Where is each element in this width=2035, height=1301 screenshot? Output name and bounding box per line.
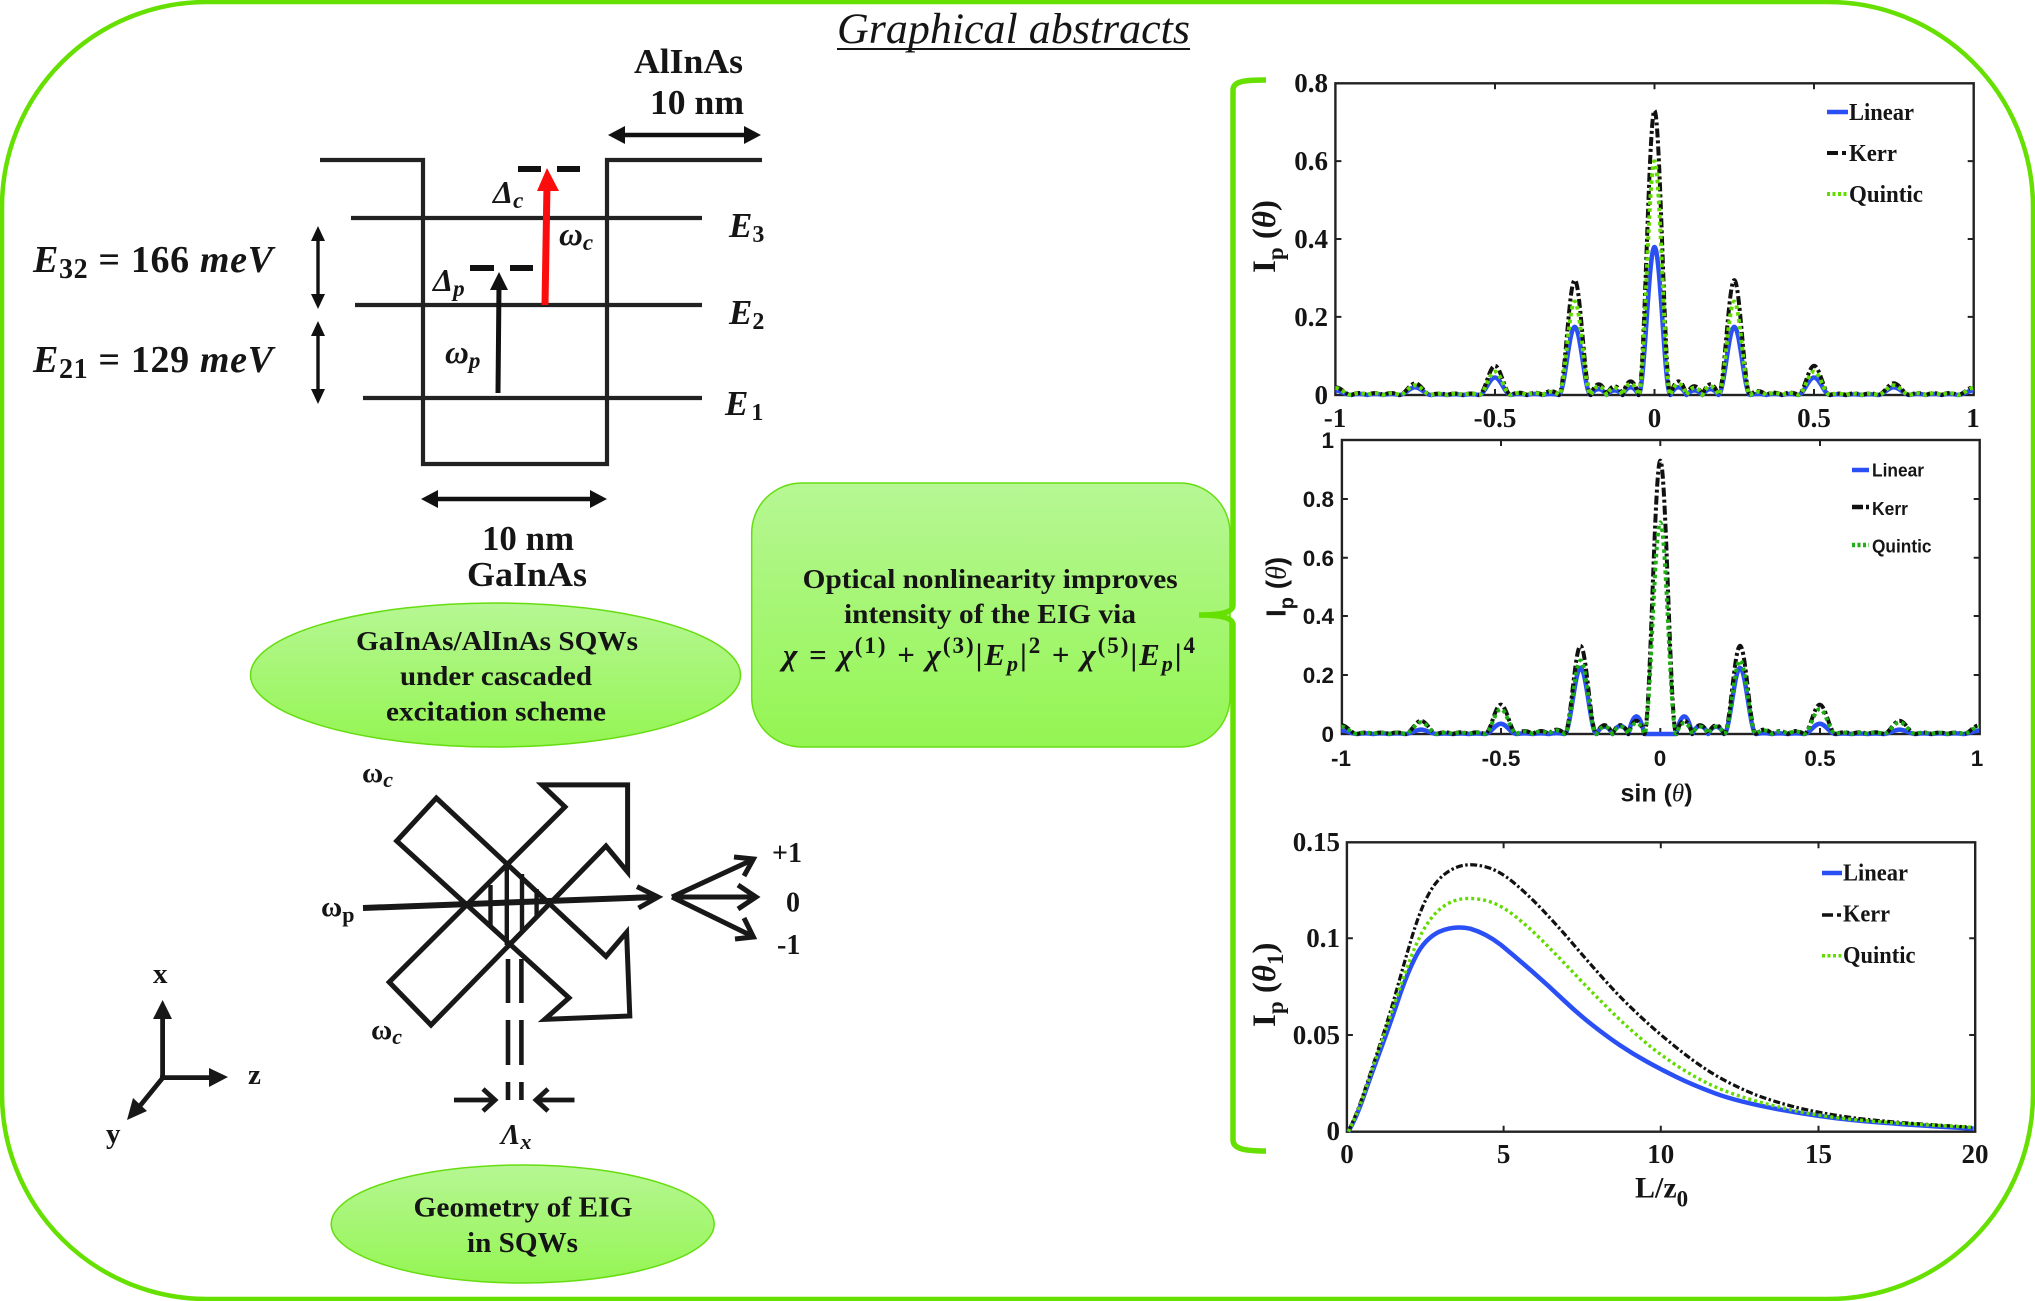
label: AlInAs 10 nm: [634, 42, 744, 122]
arrows: grating period: [454, 1089, 574, 1111]
y axis title: θ): [1247, 200, 1283, 228]
tick labels: 0.6: [1303, 546, 1334, 571]
label: probe: p: [342, 902, 354, 927]
legend: [1852, 460, 1932, 557]
dashed level: probe detuning: [431, 262, 533, 301]
diffraction order arrows: [672, 857, 756, 939]
tick labels: 1: [1966, 403, 1980, 433]
energy level E3: 3: [752, 222, 764, 248]
icon: coordinate axes: z: [248, 1059, 261, 1091]
label: diffraction orders: 0: [786, 888, 800, 918]
y axis title: (: [1247, 228, 1283, 247]
energy level E2: 2: [752, 309, 764, 335]
series: linear: [1335, 247, 1974, 395]
y axis title: (: [1247, 982, 1283, 1001]
tick labels: -1: [1324, 403, 1346, 433]
label: coupling top: c: [383, 767, 393, 792]
title: Graphical abstracts: [837, 6, 1190, 53]
callout: optical nonlinearity: χ: [927, 637, 941, 672]
tick labels: 0.5: [1797, 403, 1831, 433]
y axis title: ): [1247, 942, 1283, 953]
tick labels: 0.2: [1294, 302, 1328, 332]
label: E32 energy: meV: [200, 239, 273, 281]
label: E21 energy: E: [33, 339, 58, 381]
callout: optical nonlinearity: (5): [1098, 633, 1128, 658]
legend: [1822, 861, 1916, 969]
y axis title: I: [1261, 609, 1292, 617]
tick labels: -1: [1331, 746, 1351, 771]
callout: optical nonlinearity: p: [1160, 651, 1173, 676]
callout: cascaded excitation scheme: under cascaded: [400, 661, 592, 691]
tick labels: 20: [1962, 1139, 1988, 1169]
tick labels: 0.5: [1804, 746, 1836, 771]
curves: [1335, 111, 1974, 395]
dashed level: coupling detuning: [491, 169, 580, 213]
arrow: probe field: ω: [445, 335, 469, 371]
label: AlInAs 10 nm: 10 nm: [650, 83, 744, 122]
legend: Linear: [1872, 460, 1924, 481]
callout: optical nonlinearity: |: [1175, 637, 1182, 672]
dashed level: coupling detuning: Δ: [493, 174, 513, 210]
icon: coordinate axes: [106, 958, 261, 1150]
tick labels: 0.05: [1293, 1020, 1340, 1050]
callout: optical nonlinearity: 2: [1029, 633, 1040, 658]
energy level E1: E: [725, 384, 748, 423]
series: quintic: [1348, 898, 1974, 1132]
label: 10 nm GaInAs: 10 nm: [482, 519, 574, 558]
label: grating period: x: [519, 1129, 531, 1154]
y axis title: (: [1261, 579, 1292, 597]
y axis title: p: [1277, 597, 1299, 609]
label: AlInAs 10 nm: AlInAs: [634, 42, 743, 81]
dashed level: coupling detuning: c: [513, 188, 523, 213]
series: quintic: [1341, 522, 1979, 734]
callout: optical nonlinearity: [752, 483, 1230, 747]
series: Kerr: [1335, 111, 1974, 395]
label: coupling top: ω: [362, 757, 383, 789]
label: diffraction orders: [772, 838, 802, 961]
beam arrow: lower-left to upper-right: [389, 785, 628, 1025]
legend: Linear: [1849, 100, 1914, 126]
tick labels: 0.2: [1303, 663, 1334, 688]
callout: cascaded excitation scheme: [250, 603, 740, 747]
series: Kerr: [1341, 461, 1979, 734]
dashed level: probe detuning: Δ: [433, 262, 453, 298]
label: probe: ω: [321, 891, 342, 923]
tick labels: [1293, 827, 1988, 1169]
arrow: probe field: p: [467, 348, 480, 373]
tick labels: 5: [1497, 1139, 1510, 1169]
tick labels: 0: [1654, 746, 1666, 771]
y axis title: I: [1247, 260, 1283, 273]
arrow: coupling field: [537, 168, 593, 305]
grating period dashes: [508, 959, 521, 1100]
tick labels: 0.15: [1293, 827, 1340, 857]
probe beam arrow: [363, 887, 658, 908]
energy level E1: [363, 384, 763, 426]
callout: geometry of EIG: [331, 1165, 714, 1283]
y axis title: 1: [1263, 953, 1288, 965]
label: E32 energy: E: [33, 239, 58, 281]
callout: optical nonlinearity: χ = χ: [783, 637, 853, 672]
chart: intensity vs sin theta (middle): [1261, 428, 1983, 808]
tick labels: 0.1: [1306, 923, 1340, 953]
callout: optical nonlinearity: +: [887, 637, 925, 672]
callout: optical nonlinearity: (3): [943, 633, 974, 658]
tick labels: 0.6: [1294, 146, 1328, 176]
curves: [1341, 461, 1979, 734]
label: diffraction orders: +1: [772, 838, 802, 869]
legend: Quintic: [1843, 943, 1916, 969]
tick labels: 0: [1340, 1139, 1354, 1169]
series: linear: [1348, 928, 1974, 1132]
tick labels: 0.4: [1294, 224, 1328, 254]
axes: [1335, 83, 1974, 395]
callout: optical nonlinearity: +: [1042, 637, 1079, 672]
icon: coordinate axes: x: [153, 958, 168, 990]
energy level E3: [351, 206, 764, 248]
tick labels: 0: [1314, 380, 1328, 410]
y axis title: θ: [1247, 965, 1283, 982]
label: 10 nm GaInAs: [467, 519, 587, 594]
legend: Linear: [1843, 861, 1908, 887]
callout: optical nonlinearity: E: [984, 637, 1005, 672]
arrow: barrier width: [608, 126, 761, 144]
x axis title: sin (θ): [1620, 780, 1693, 808]
callout: optical nonlinearity: E: [1139, 637, 1160, 672]
y axis title: θ): [1261, 557, 1293, 580]
label: coupling bottom: ω: [371, 1014, 392, 1046]
legend: Quintic: [1849, 182, 1923, 208]
tick labels: 0.4: [1303, 604, 1334, 629]
series: quintic: [1335, 161, 1974, 395]
series: Kerr: [1348, 865, 1974, 1132]
label: E32 energy: 32: [59, 254, 88, 285]
arrow: coupling field: ω: [559, 217, 583, 253]
chart: intensity vs sin theta (top): [1247, 68, 1980, 433]
arrow: well width: [421, 490, 607, 508]
energy level E1: 1: [751, 400, 763, 426]
energy level E2: E: [729, 293, 752, 332]
y axis title: I: [1247, 1014, 1283, 1027]
tick labels: 15: [1805, 1139, 1832, 1169]
panel: quantum well energy diagram: [32, 42, 764, 594]
tick labels: 0: [1321, 722, 1334, 747]
callout: optical nonlinearity: 4: [1184, 633, 1196, 658]
legend: Kerr: [1843, 902, 1890, 928]
axes: [1347, 842, 1975, 1132]
legend: Kerr: [1872, 498, 1908, 519]
tick labels: 1: [1321, 428, 1334, 453]
bracket linking callout to charts: [1199, 80, 1266, 1151]
beam arrow: upper-left to lower-right: [397, 798, 630, 1019]
label: diffraction orders: -1: [777, 930, 800, 961]
callout: optical nonlinearity: |: [976, 637, 982, 672]
grating hatch lines: [490, 862, 537, 945]
series: linear: [1341, 668, 1979, 734]
legend: Kerr: [1849, 141, 1897, 167]
label: 10 nm GaInAs: GaInAs: [467, 555, 587, 594]
label: E32 energy: = 166: [88, 239, 199, 281]
label: E21 energy: meV: [200, 339, 273, 381]
panel: geometry of EIG diagram: [321, 757, 802, 1154]
arrow: coupling field: c: [583, 230, 593, 255]
energy level E2: [355, 293, 764, 335]
callout: optical nonlinearity: intensity of the EIG via: [844, 599, 1137, 629]
arrow: probe field: [445, 272, 508, 393]
callout: cascaded excitation scheme: excitation scheme: [386, 696, 606, 726]
tick labels: [1294, 68, 1980, 433]
label: grating period: Λ: [501, 1119, 520, 1151]
y axis title: p: [1263, 1001, 1288, 1014]
dashed level: probe detuning: p: [451, 276, 465, 301]
callout: optical nonlinearity: Optical nonlinearity improves: [803, 564, 1178, 594]
icon: coordinate axes: y: [106, 1118, 121, 1150]
callout: geometry of EIG: Geometry of EIG: [414, 1192, 633, 1224]
quantum well outline: [320, 160, 762, 464]
x axis title: L/z: [1635, 1172, 1677, 1204]
callout: geometry of EIG: in SQWs: [467, 1228, 578, 1259]
energy level E3: E: [729, 206, 752, 245]
arrow: E32 span: [311, 226, 325, 309]
chart: intensity vs L/z0 (bottom): [1247, 827, 1988, 1212]
tick labels: 0: [1326, 1116, 1340, 1146]
x axis title: 0: [1677, 1186, 1688, 1212]
tick labels: 10: [1647, 1139, 1674, 1169]
label: E21 energy: = 129: [88, 339, 199, 381]
callout: cascaded excitation scheme: GaInAs/AlInAs SQWs: [356, 626, 638, 656]
callout: optical nonlinearity: |: [1130, 637, 1137, 672]
tick labels: 1: [1971, 746, 1983, 771]
tick labels: -0.5: [1482, 746, 1520, 771]
callout: optical nonlinearity: |: [1020, 637, 1027, 672]
callout: optical nonlinearity: (1): [855, 633, 886, 658]
label: E21 energy: 21: [59, 354, 88, 385]
legend: [1827, 100, 1923, 208]
arrow: E21 span: [311, 321, 325, 404]
axes: [1342, 440, 1980, 734]
tick labels: 0.8: [1294, 68, 1328, 98]
legend: Quintic: [1872, 536, 1932, 557]
tick labels: 0.8: [1303, 487, 1334, 512]
tick labels: 0: [1648, 403, 1661, 433]
y axis title: p: [1263, 247, 1288, 260]
callout: optical nonlinearity: p: [1005, 651, 1018, 676]
callout: optical nonlinearity: χ: [1081, 637, 1096, 672]
tick labels: [1303, 428, 1983, 771]
label: coupling bottom: c: [392, 1024, 402, 1049]
tick labels: -0.5: [1474, 403, 1516, 433]
curves: [1348, 865, 1974, 1132]
